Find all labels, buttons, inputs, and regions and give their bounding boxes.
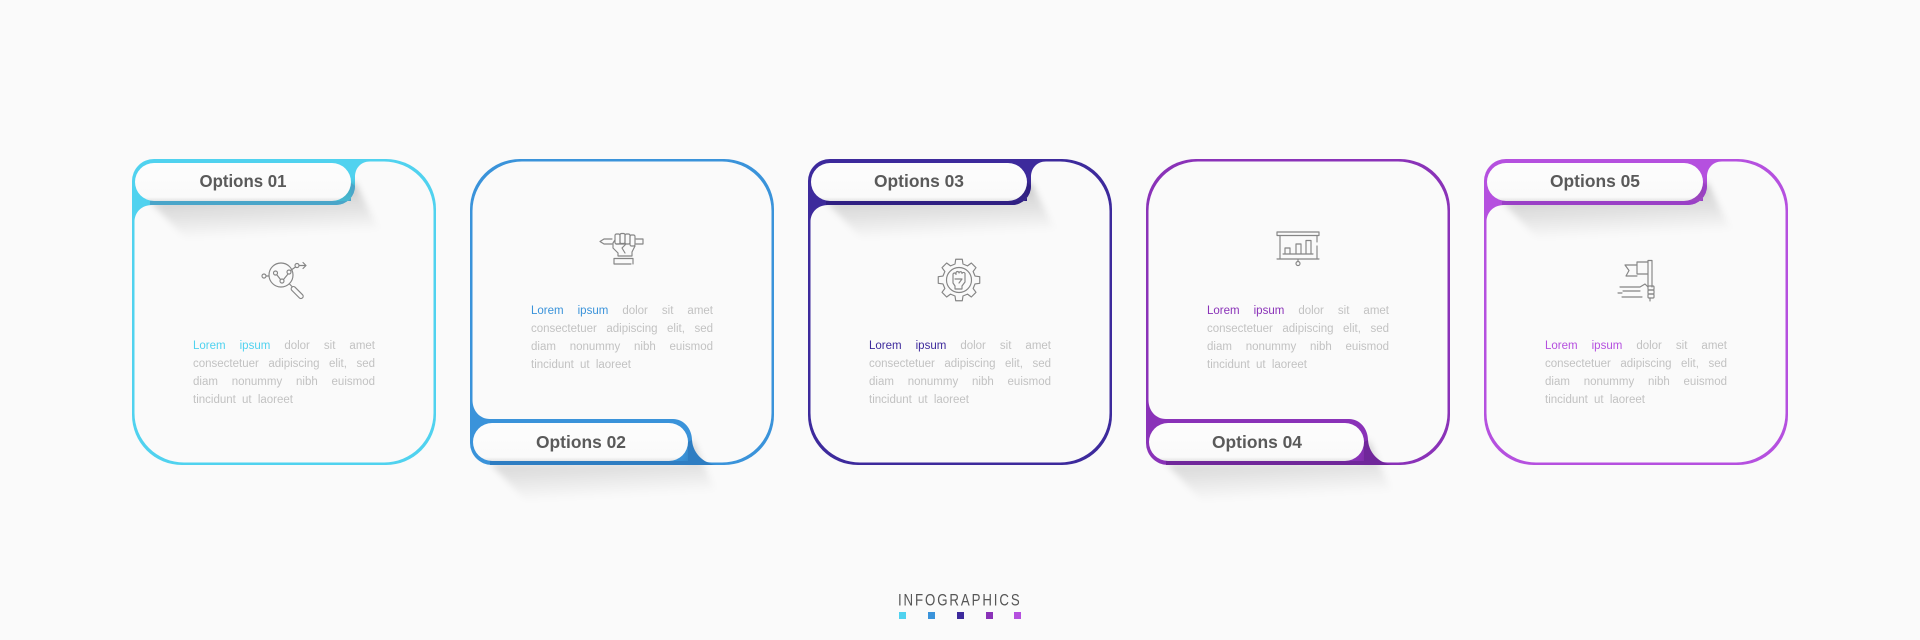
heading: Options 01: Options 01 [200,171,287,191]
body text: Lorem ipsum dolor sit amet [1207,304,1389,316]
body text [869,340,1051,406]
body text: diam nonummy nibh euismod [531,341,713,353]
body text: tincidunt ut laoreet [531,359,631,371]
long shadow [490,439,720,501]
body text: consectetuer adipiscing elit, sed [1545,358,1727,370]
icon: fist holding pen [600,234,643,264]
body text [193,340,375,406]
footer title: INFOGRAPHICS [898,591,1020,610]
panel: option 01 [132,159,436,465]
body text: Lorem ipsum dolor sit amet [869,340,1051,352]
card interior [810,162,1110,462]
heading: Options 03: Options 03 [874,171,964,191]
pill [1487,163,1703,201]
panel: option 02 [470,159,774,492]
body text: consectetuer adipiscing elit, sed [531,323,713,335]
icon: gear with fist [938,259,980,301]
pill edge [490,440,716,465]
card interior [1486,162,1786,462]
body text: tincidunt ut laoreet [869,394,969,406]
heading: Options 05: Options 05 [1550,171,1640,191]
body text [1545,340,1727,406]
long shadow [1502,183,1736,239]
long shadow [826,183,1060,239]
footer: infographics title and colour squares [898,591,1021,619]
body text: diam nonummy nibh euismod [869,376,1051,388]
body text [531,304,713,371]
pill [135,163,351,201]
body text: diam nonummy nibh euismod [1545,376,1727,388]
body text [1207,304,1389,371]
card interior [134,162,434,462]
body text: diam nonummy nibh euismod [1207,341,1389,353]
heading: Options 02: Options 02 [536,432,626,452]
icon: hand holding flag [1618,260,1654,301]
pill [811,163,1027,201]
icon: magnifier with chart [262,262,306,299]
body text: tincidunt ut laoreet [1545,394,1645,406]
card outline [808,159,1112,465]
icon: presentation board [1277,232,1319,266]
pill edge [150,183,355,205]
panel: option 03 [808,159,1112,465]
card outline [132,159,436,465]
panel: option 04 [1146,159,1450,492]
card interior [1148,162,1448,462]
card interior [472,162,772,462]
pill [473,423,688,461]
pill [1149,423,1364,461]
card outline [1484,159,1788,465]
pill edge [1502,183,1707,205]
long shadow [1166,439,1396,501]
card outline [1146,159,1450,465]
body text: Lorem ipsum dolor sit amet [1545,340,1727,352]
body text: Lorem ipsum dolor sit amet [531,304,713,316]
card outline [470,159,774,465]
body text: diam nonummy nibh euismod [193,376,375,388]
body text: consectetuer adipiscing elit, sed [869,358,1051,370]
long shadow [150,183,384,239]
body text: tincidunt ut laoreet [1207,359,1307,371]
colour squares [899,612,1021,619]
body text: consectetuer adipiscing elit, sed [1207,323,1389,335]
body text: tincidunt ut laoreet [193,394,293,406]
pill edge [826,183,1031,205]
panel: option 05 [1484,159,1788,465]
pill edge [1166,440,1392,465]
body text: consectetuer adipiscing elit, sed [193,358,375,370]
body text: Lorem ipsum dolor sit amet [193,340,375,352]
heading: Options 04: Options 04 [1212,432,1302,452]
